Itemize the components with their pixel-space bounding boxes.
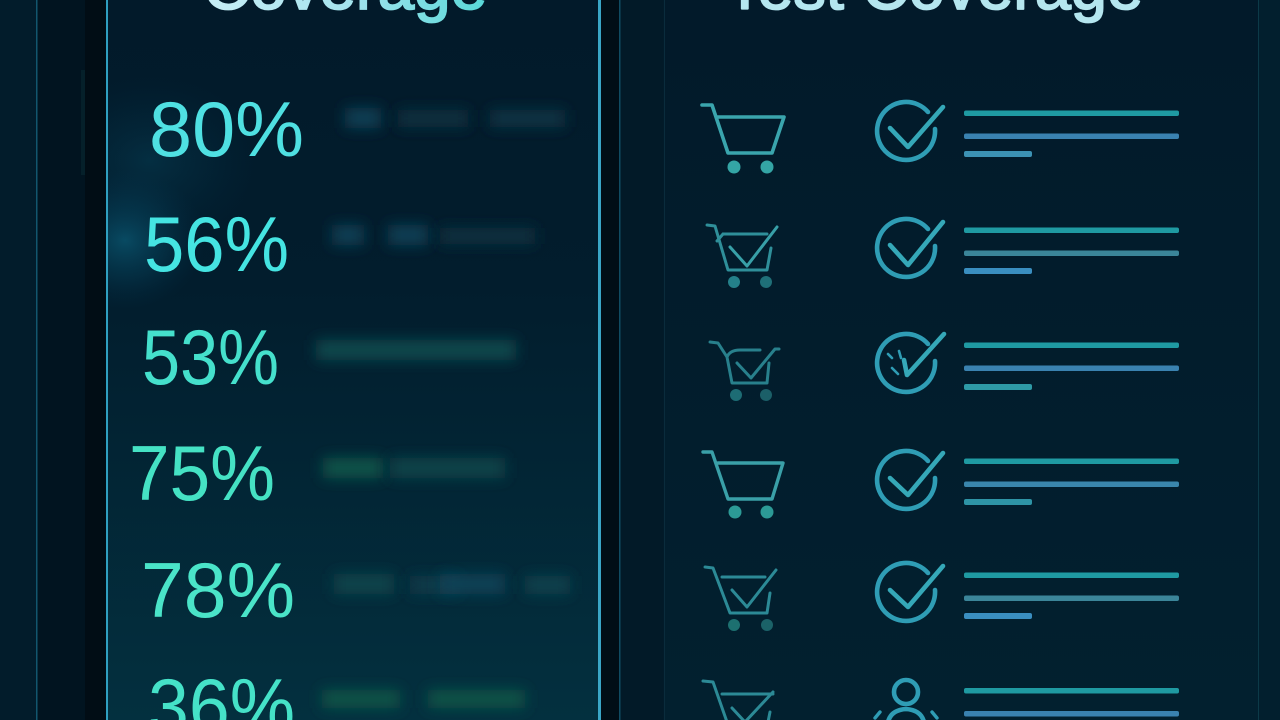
row: 78%: 78% <box>141 546 295 634</box>
text lines: row 1 <box>964 110 1179 157</box>
row: 56%: 56% <box>144 200 289 288</box>
row: 56% <box>144 200 535 288</box>
row: 78% <box>141 546 570 634</box>
text lines: row 4 <box>964 458 1179 505</box>
text lines: row 3 <box>964 342 1179 390</box>
row: 53%: 53% <box>142 313 279 401</box>
icon: check circle 2 <box>877 219 943 277</box>
icon: cart with check 3 <box>710 342 779 401</box>
row: 75%: 75% <box>129 429 275 517</box>
panel: test coverage <box>702 0 1179 720</box>
row: 80% <box>149 85 565 173</box>
row: 36% <box>148 662 525 720</box>
icon: cart 4 <box>703 452 783 518</box>
icon: cart with check 5 <box>705 567 776 631</box>
panel: coverage <box>106 0 601 720</box>
icon: cart with check 6 <box>703 681 773 720</box>
icon: check circle 5 <box>877 563 943 621</box>
icon: cart with check 2 <box>707 225 777 288</box>
icon: cart 1 <box>702 105 784 174</box>
row: 75% <box>129 429 505 517</box>
text lines: row 2 <box>964 228 1179 274</box>
text lines: row 6 <box>964 688 1179 716</box>
row: 80%: 80% <box>149 85 304 173</box>
icon: check circle 3 <box>877 334 944 392</box>
row: 53% <box>142 313 516 401</box>
icon: check circle 1 <box>877 102 943 160</box>
icon: person <box>875 680 937 720</box>
icon: check circle 4 <box>877 451 943 509</box>
text lines: row 5 <box>964 572 1179 619</box>
